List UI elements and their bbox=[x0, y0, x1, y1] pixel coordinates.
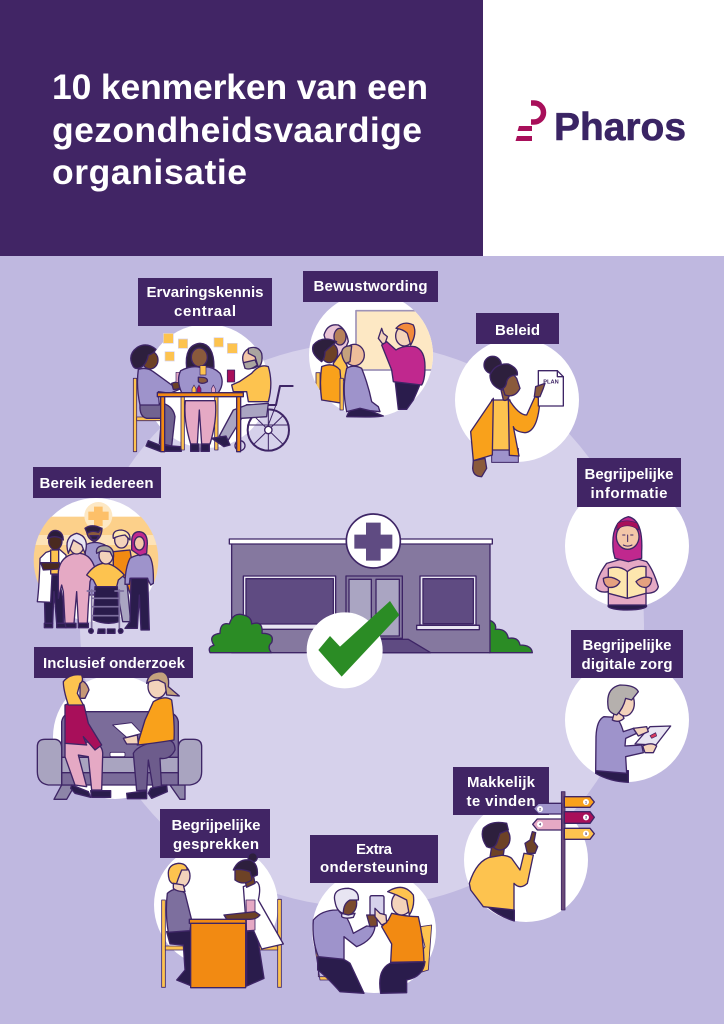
icon: left bush bbox=[209, 614, 272, 653]
illustration: man at a signpost: 1 bbox=[585, 800, 587, 804]
building wall bbox=[232, 543, 490, 653]
label: ondersteuning bbox=[320, 859, 428, 876]
panel: Extra ondersteuning bbox=[310, 835, 438, 993]
panel: Makkelijk te vinden bbox=[453, 767, 594, 922]
logo: Pharos: Pharos bbox=[554, 106, 686, 149]
door bbox=[346, 576, 402, 638]
label: Begrijpelijke bbox=[584, 466, 674, 483]
panel: Begrijpelijke digitale zorg bbox=[565, 630, 689, 782]
illustration: two men with a phone bbox=[313, 887, 432, 993]
white circle bbox=[565, 658, 689, 782]
white circle bbox=[145, 324, 269, 448]
label: Makkelijk bbox=[467, 774, 536, 791]
white circle bbox=[309, 293, 433, 417]
illustration: man at a signpost: 4 bbox=[539, 823, 542, 827]
panel: Beleid bbox=[455, 313, 579, 477]
label: Beleid bbox=[495, 322, 540, 339]
illustration: woman with hijab reading bbox=[596, 517, 658, 610]
check mark badge bbox=[307, 601, 399, 688]
panel: Begrijpelijke gesprekken bbox=[154, 809, 283, 988]
roof edge bbox=[229, 539, 492, 544]
illustration: man with tablet bbox=[596, 685, 671, 782]
label: gesprekken bbox=[173, 836, 259, 853]
label bbox=[303, 271, 438, 302]
white circle bbox=[53, 675, 177, 799]
label: Ervaringskennis bbox=[146, 284, 264, 301]
label bbox=[310, 835, 438, 883]
illustration: man at a signpost: 3 bbox=[585, 816, 587, 820]
title: gezondheidsvaardige bbox=[52, 110, 422, 150]
label: Inclusief onderzoek bbox=[43, 655, 186, 672]
label: te vinden bbox=[466, 793, 536, 810]
door step bbox=[373, 639, 431, 653]
title bbox=[52, 67, 428, 192]
logo panel bbox=[483, 0, 724, 256]
sign with plus bbox=[346, 514, 400, 568]
white circle bbox=[455, 338, 579, 462]
left window bbox=[243, 576, 336, 629]
illustration: diverse group of people bbox=[37, 526, 153, 633]
illustration: interview on a sofa bbox=[37, 672, 202, 799]
title: organisatie bbox=[52, 152, 247, 192]
white circle bbox=[464, 798, 588, 922]
label: Extra bbox=[356, 841, 393, 858]
panel: Ervaringskennis centraal bbox=[131, 278, 293, 452]
label: Bereik iedereen bbox=[40, 475, 154, 492]
right window bbox=[417, 576, 479, 630]
panel: Inclusief onderzoek bbox=[34, 647, 202, 799]
label bbox=[138, 278, 272, 326]
panel: Bereik iedereen bbox=[33, 467, 161, 633]
white circle with clinic background bbox=[33, 498, 160, 622]
illustration: man at a signpost bbox=[469, 792, 594, 921]
header panel bbox=[0, 0, 483, 256]
illustration: woman holding a plan: PLAN bbox=[543, 379, 559, 385]
white circle bbox=[565, 484, 689, 608]
label: Begrijpelijke bbox=[582, 637, 672, 654]
white circle bbox=[154, 843, 278, 967]
label bbox=[160, 809, 270, 858]
title: 10 kenmerken van een bbox=[52, 67, 428, 107]
label bbox=[476, 313, 559, 344]
white circle bbox=[312, 869, 436, 993]
label: informatie bbox=[590, 485, 668, 502]
label: Bewustwording bbox=[314, 278, 428, 295]
label bbox=[453, 767, 549, 815]
panel: Bewustwording bbox=[303, 271, 438, 417]
label bbox=[34, 647, 193, 678]
label: centraal bbox=[174, 303, 236, 320]
illustration: man at a signpost: 5 bbox=[585, 832, 587, 836]
label bbox=[577, 458, 681, 507]
illustration: health centre with check mark bbox=[209, 514, 532, 688]
icon: right bush bbox=[489, 620, 532, 653]
label bbox=[33, 467, 161, 498]
illustration: people around a table bbox=[131, 333, 293, 452]
central light circle bbox=[80, 343, 644, 907]
label: digitale zorg bbox=[582, 656, 672, 673]
illustration: woman holding a plan bbox=[471, 356, 563, 477]
label: Begrijpelijke bbox=[172, 817, 260, 834]
label bbox=[571, 630, 683, 678]
illustration: man presenting at a board bbox=[313, 311, 436, 417]
illustration: man at a signpost: 2 bbox=[539, 807, 541, 811]
panel: Begrijpelijke informatie bbox=[565, 458, 689, 610]
illustration: conversation at a desk bbox=[162, 853, 283, 988]
